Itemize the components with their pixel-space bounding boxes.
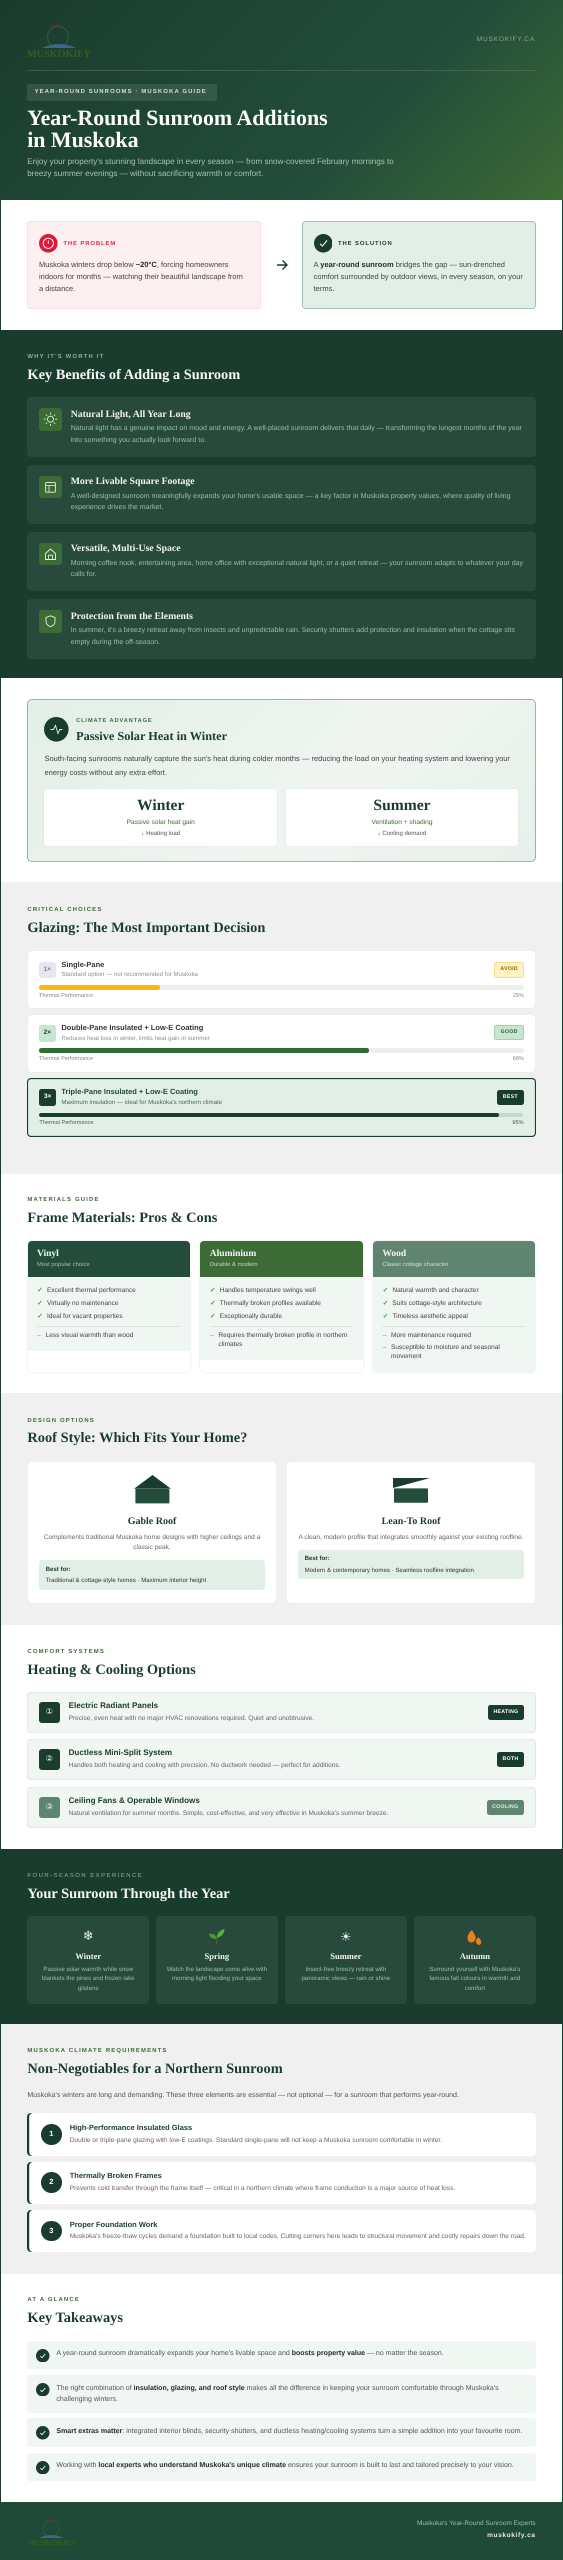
card: vinyl: ✓ — [37, 1287, 43, 1294]
con: More maintenance required — [391, 1332, 471, 1339]
summer note: ↓ Cooling demand — [378, 831, 426, 837]
card: vinyl: ✓ — [37, 1313, 43, 1320]
pro: Handles temperature swings well — [220, 1287, 316, 1294]
badge: avoid — [494, 962, 524, 978]
card: gable roof — [28, 1462, 276, 1603]
best for label: Best for: — [305, 1555, 330, 1562]
wood name: Wood — [382, 1249, 406, 1259]
requirement name: Proper Foundation Work — [70, 2220, 157, 2229]
requirement 2 — [27, 2162, 536, 2204]
icon: floor plan — [39, 476, 62, 498]
takeaway 4 — [27, 2453, 536, 2481]
problem label: THE PROBLEM — [63, 241, 116, 247]
card: wood: – — [383, 1332, 386, 1339]
takeaway text — [56, 2384, 499, 2403]
heading: Non-Negotiables for a Northern Sunroom — [27, 2061, 283, 2077]
intro text: Enjoy your property's stunning landscape in every season — from snow-covered February mornings to — [27, 157, 394, 166]
requirement 1 — [27, 2113, 536, 2156]
best for box — [298, 1550, 524, 1579]
benefit text — [71, 424, 522, 444]
card: vinyl: – — [37, 1332, 41, 1339]
title: in Muskoka — [27, 127, 139, 152]
number — [41, 2124, 62, 2145]
number: 1 — [49, 2129, 53, 2138]
solution text: A year-round sunroom bridges the gap — sun-drenched — [314, 260, 505, 269]
bar label: Thermal Performance — [39, 993, 93, 999]
season text — [166, 1966, 267, 1982]
badge: both: BOTH — [503, 1756, 518, 1762]
heading: Heating & Cooling Options — [27, 1662, 196, 1678]
icon: gable house — [134, 1475, 171, 1504]
glazing: single pane — [28, 951, 535, 1008]
section label: FOUR-SEASON EXPERIENCE — [27, 1873, 143, 1879]
con: Susceptible to moisture and seasonal — [391, 1344, 500, 1351]
wood header — [373, 1241, 535, 1277]
card: aluminium: ✓ — [210, 1313, 216, 1320]
card: lean-to roof — [287, 1462, 535, 1603]
footer tagline: Muskoka's Year-Round Sunroom Experts — [417, 2520, 536, 2527]
winter text: Passive solar heat gain — [127, 819, 195, 826]
bar label: Thermal Performance — [39, 1056, 93, 1062]
number: 2 — [49, 2177, 53, 2186]
badge: heating — [488, 1705, 524, 1720]
heading: Key Benefits of Adding a Sunroom — [27, 367, 240, 383]
season text: blankets the pines and frozen lake — [42, 1975, 135, 1982]
season text: comfort — [465, 1985, 485, 1992]
benefit text: A well-designed sunroom meaningfully expands your home's usable space — a key factor in Muskoka property values, where quality of living — [71, 493, 511, 500]
tag line pill — [27, 84, 217, 101]
card: wood: – — [383, 1344, 386, 1351]
card: vinyl: ✓ — [37, 1300, 43, 1307]
takeaway 3 — [27, 2418, 536, 2447]
panel text: South-facing sunrooms naturally capture the sun's heat during colder months — reducing the load on your heating system and lowering your — [44, 754, 510, 763]
card: wood — [373, 1241, 535, 1372]
option text: Handles both heating and cooling with precision. No ductwork needed — perfect for additions. — [69, 1762, 340, 1769]
season text: panoramic views — rain or shine — [302, 1975, 390, 1982]
benefit text: empty during the off-season. — [71, 639, 160, 646]
benefit text: Morning coffee nook, entertaining area, home office with exceptional natural light, or a quiet retreat — your sunroom adapts to whatever your day — [71, 560, 523, 567]
heading: Key Takeaways — [27, 2310, 123, 2326]
performance bar — [39, 985, 524, 990]
icon: seedling — [209, 1929, 224, 1945]
vinyl note: Most popular choice — [37, 1262, 90, 1268]
requirement text: Muskoka's freeze-thaw cycles demand a foundation built to local codes. Cutting corners here leads to structural movement and costly repairs down the road. — [70, 2233, 526, 2240]
roof text: A clean, modern profile that integrates smoothly against your existing roofline. — [299, 1534, 523, 1541]
icon: check — [36, 2383, 50, 2396]
badge: cooling: COOLING — [492, 1804, 518, 1810]
intro text — [27, 157, 394, 178]
card: wood: ✓ — [383, 1313, 388, 1320]
benefit title: More Livable Square Footage — [71, 476, 195, 487]
section: passive solar — [1, 678, 562, 882]
season text: Insect-free breezy retreat with — [305, 1966, 386, 1973]
season name: Autumn — [460, 1951, 490, 1961]
season name: Summer — [330, 1951, 361, 1961]
season text: Watch the landscape come alive with — [167, 1966, 267, 1973]
panel text: energy costs without any extra effort. — [44, 768, 167, 777]
requirement text: Double or triple-pane glazing with low-E coatings. Standard single-pane will not keep a Muskoka sunroom comfortable in winter. — [70, 2137, 442, 2144]
requirement text: Prevents cold transfer through the frame itself — critical in a northern climate where frame conduction is a major source of heat loss. — [70, 2185, 455, 2192]
roof text: Complements traditional Muskoka home designs with higher ceilings and a — [44, 1534, 260, 1541]
option: mini-split — [27, 1739, 536, 1780]
number icon: ① — [46, 1707, 53, 1716]
performance bar — [39, 1048, 524, 1053]
best for text: Modern & contemporary homes · Seamless roofline integration — [305, 1567, 474, 1574]
icon: shield — [39, 610, 62, 633]
pro: Thermally broken profiles available — [220, 1300, 321, 1307]
benefit: natural light — [27, 397, 536, 457]
best for box — [39, 1560, 265, 1590]
icon: 3x — [39, 1089, 56, 1106]
badge: good: GOOD — [501, 1029, 518, 1035]
season name: Winter — [75, 1951, 101, 1961]
option: fans and windows — [27, 1787, 536, 1828]
season: spring — [156, 1916, 278, 2004]
badge: avoid: AVOID — [500, 966, 518, 972]
tag line pill: YEAR-ROUND SUNROOMS · MUSKOKA GUIDE — [35, 89, 207, 95]
benefit text — [70, 492, 511, 511]
winter note: ↓ Heating load — [141, 831, 180, 837]
icon: check — [36, 2461, 50, 2474]
option name: Electric Radiant Panels — [69, 1701, 158, 1710]
benefit text: experience drives the market. — [71, 504, 163, 511]
pro: Suits cottage-style architecture — [392, 1300, 482, 1307]
option name: Ductless Mini-Split System — [69, 1748, 172, 1757]
summer text: Ventilation + shading — [371, 819, 432, 826]
benefit: protection — [27, 599, 536, 659]
panel title: Passive Solar Heat in Winter — [76, 729, 227, 743]
glazing: triple pane — [27, 1078, 536, 1137]
takeaway 2 — [27, 2375, 536, 2413]
problem text: indoors for months — watching their beautiful landscape from — [39, 272, 243, 281]
best for label: Best for: — [46, 1566, 71, 1573]
kicker: CLIMATE ADVANTAGE — [76, 718, 153, 724]
requirement name: High-Performance Insulated Glass — [70, 2123, 192, 2132]
benefit text: In summer, it's a breezy retreat away from insects and unpredictable rain. Security shutters add protection and insulation when the cottage sits — [71, 627, 515, 634]
card: wood: ✓ — [383, 1287, 388, 1294]
season name: Spring — [205, 1951, 229, 1961]
option: radiant panels — [27, 1692, 536, 1733]
benefit title: Versatile, Multi-Use Space — [71, 543, 181, 554]
season text: morning light flooding your space — [172, 1975, 262, 1982]
pro: Virtually no maintenance — [47, 1300, 119, 1307]
option name: Triple-Pane Insulated + Low-E Coating — [61, 1087, 198, 1096]
footer site link: muskokify.ca — [487, 2532, 536, 2539]
card: summer — [286, 789, 518, 846]
takeaway 1 — [27, 2341, 536, 2369]
pro: Exceptionally durable — [220, 1313, 282, 1320]
card: aluminium: ✓ — [210, 1287, 216, 1294]
icon: 1x: 1× — [44, 966, 51, 973]
wood note: Classic cottage character — [382, 1262, 449, 1268]
badge: good — [494, 1025, 524, 1040]
season text: Surround yourself with Muskoka's — [429, 1966, 520, 1973]
roof text — [44, 1534, 260, 1551]
panel: solution — [302, 221, 536, 309]
panel text — [44, 754, 510, 777]
number icon — [39, 1702, 60, 1723]
icon: alert — [39, 234, 58, 253]
number icon: ③ — [46, 1802, 53, 1811]
benefit text — [71, 560, 523, 578]
season text: famous fall colours in warmth and — [429, 1975, 520, 1982]
card: wood: ✓ — [383, 1300, 388, 1307]
solution label: THE SOLUTION — [338, 241, 393, 247]
option note: Standard option — not recommended for Muskoka — [61, 971, 198, 978]
season: winter — [27, 1916, 149, 2004]
card: aluminium: – — [210, 1332, 214, 1339]
icon: leaves — [468, 1930, 482, 1945]
pro: Natural warmth and character — [392, 1287, 479, 1294]
section: non-negotiables — [1, 2024, 562, 2274]
section: four seasons — [1, 1849, 562, 2024]
takeaway text: challenging winters. — [56, 2396, 118, 2403]
takeaway text: A year-round sunroom dramatically expands your home's livable space and boosts property value — no matter the season. — [56, 2350, 444, 2357]
solution text: terms. — [314, 284, 334, 293]
option name: Ceiling Fans & Operable Windows — [69, 1796, 200, 1805]
icon: 1x — [39, 962, 56, 978]
pro: Ideal for vacant properties — [47, 1313, 123, 1320]
section: problem and solution — [1, 200, 562, 330]
number icon — [39, 1797, 60, 1818]
title — [27, 105, 328, 152]
aluminium note: Durable & modern — [210, 1262, 258, 1268]
icon: snowflake: ❄ — [83, 1929, 94, 1944]
option text: Natural ventilation for summer months. Simple, cost-effective, and very effective in Muskoka's summer breeze. — [69, 1810, 388, 1817]
con: Requires thermally broken profile in northern — [218, 1332, 348, 1339]
icon: 3x: 3× — [44, 1093, 51, 1100]
problem text: Muskoka winters drop below −20°C, forcing homeowners — [39, 260, 229, 269]
icon: lean-to house — [393, 1478, 430, 1503]
badge: best — [497, 1090, 524, 1105]
option text: Precise, even heat with no major HVAC renovations required. Quiet and unobtrusive. — [69, 1715, 314, 1722]
requirement 3 — [27, 2210, 536, 2252]
title: Year-Round Sunroom Additions — [27, 105, 328, 130]
con: climates — [218, 1341, 242, 1348]
performance bar — [39, 1113, 523, 1117]
takeaway text: Working with local experts who understand Muskoka's unique climate ensures your sunroom is built to last and tailored precisely to your vision. — [56, 2462, 514, 2469]
card: winter — [44, 789, 277, 846]
glazing: double pane — [28, 1015, 535, 1072]
section label: CRITICAL CHOICES — [27, 907, 102, 913]
icon: sun — [39, 408, 62, 431]
benefit: square footage — [27, 465, 536, 524]
problem text: a distance. — [39, 284, 75, 293]
section: key benefits — [1, 330, 562, 678]
season text — [42, 1966, 135, 1992]
pro: Timeless aesthetic appeal — [392, 1313, 468, 1320]
heading: Your Sunroom Through the Year — [27, 1886, 230, 1902]
section label: MUSKOKA CLIMATE REQUIREMENTS — [27, 2048, 168, 2054]
icon: check — [36, 2349, 50, 2362]
panel: problem — [27, 221, 261, 309]
season: autumn — [414, 1916, 536, 2004]
aluminium name: Aluminium — [210, 1249, 256, 1259]
bar label: Thermal Performance — [39, 1120, 93, 1126]
aluminium header — [200, 1241, 363, 1277]
section: roof style — [1, 1393, 562, 1625]
badge: both — [497, 1752, 524, 1767]
intro text: breezy summer evenings — without sacrificing warmth or comfort. — [27, 169, 263, 178]
section: key takeaways — [1, 2274, 562, 2502]
footer — [0, 2502, 563, 2560]
heading: Frame Materials: Pros & Cons — [27, 1210, 217, 1226]
roof text: classic peak. — [133, 1544, 171, 1551]
bar value: 25% — [513, 993, 524, 999]
footer logo — [28, 2518, 77, 2546]
pro: Excellent thermal performance — [47, 1287, 136, 1294]
summer heading: Summer — [373, 797, 431, 814]
section: hero header — [0, 0, 563, 200]
section label: AT A GLANCE — [27, 2297, 80, 2303]
bar value: 95% — [512, 1120, 524, 1126]
vinyl header — [28, 1241, 190, 1277]
number icon — [39, 1749, 60, 1770]
best for text: Traditional & cottage-style homes · Maximum interior height — [46, 1577, 206, 1584]
card: aluminium — [200, 1241, 363, 1372]
section: heating and cooling — [1, 1625, 562, 1849]
section label: WHY IT'S WORTH IT — [27, 354, 104, 360]
icon: sun: ☀ — [340, 1929, 351, 1944]
benefit title: Natural Light, All Year Long — [71, 409, 191, 420]
site link: MUSKOKIFY.CA — [477, 36, 535, 43]
takeaway text: The right combination of insulation, glazing, and roof style makes all the difference in keeping your sunroom comfortable through Muskoka's — [56, 2385, 499, 2392]
con: Less visual warmth than wood — [46, 1332, 133, 1339]
option note: Reduces heat loss in winter, limits heat gain in summer — [61, 1035, 210, 1042]
benefit text: into something you actually look forward to. — [71, 437, 206, 444]
card: vinyl — [28, 1241, 190, 1372]
number: 3 — [49, 2226, 53, 2235]
season text: Passive solar warmth while snow — [43, 1966, 133, 1973]
section label: COMFORT SYSTEMS — [27, 1649, 105, 1655]
card: aluminium: ✓ — [210, 1300, 216, 1307]
arrow — [277, 260, 288, 270]
section label: MATERIALS GUIDE — [27, 1197, 100, 1203]
icon: 2x: 2× — [44, 1029, 51, 1036]
solution text: comfort surrounded by outdoor views, in every season, on your — [314, 272, 523, 281]
requirement name: Thermally Broken Frames — [70, 2171, 162, 2180]
icon: check — [36, 2426, 50, 2440]
logo — [27, 24, 92, 59]
option note: Maximum insulation — ideal for Muskoka's northern climate — [61, 1099, 222, 1106]
benefit title: Protection from the Elements — [71, 611, 193, 622]
intro text: Muskoka's winters are long and demanding. These three elements are essential — not optional — for a sunroom that performs year-round. — [27, 2092, 459, 2099]
season text: glistens — [78, 1985, 99, 1992]
number icon: ② — [46, 1754, 53, 1763]
panel: passive solar heat — [27, 699, 536, 862]
benefit text: Natural light has a genuine impact on mood and energy. A well-placed sunroom delivers that daily — transforming the longest months of the year — [71, 425, 522, 432]
icon: 2x — [39, 1025, 56, 1042]
option name: Double-Pane Insulated + Low-E Coating — [61, 1023, 203, 1032]
icon: pulse — [44, 717, 69, 742]
badge: cooling — [487, 1800, 524, 1815]
winter heading: Winter — [137, 797, 184, 814]
icon: check — [314, 234, 332, 253]
number — [41, 2172, 62, 2193]
con — [218, 1332, 348, 1348]
con — [391, 1344, 500, 1360]
vinyl name: Vinyl — [37, 1249, 59, 1259]
benefit text: calls for. — [71, 571, 97, 578]
season text — [302, 1966, 390, 1982]
number — [41, 2221, 62, 2241]
icon: house — [39, 543, 62, 565]
roof name: Gable Roof — [128, 1516, 176, 1527]
heading: Roof Style: Which Fits Your Home? — [27, 1430, 247, 1446]
season: summer — [285, 1916, 407, 2004]
section label: DESIGN OPTIONS — [27, 1418, 95, 1424]
heading: Glazing: The Most Important Decision — [27, 920, 265, 936]
option name: Single-Pane — [61, 960, 104, 969]
badge: heating: HEATING — [493, 1709, 519, 1715]
season text — [429, 1966, 520, 1992]
roof name: Lean-To Roof — [382, 1516, 440, 1527]
problem text — [39, 260, 243, 293]
con: movement — [391, 1352, 422, 1360]
section: glazing — [1, 882, 562, 1174]
section: frame materials — [1, 1174, 562, 1393]
badge: best: BEST — [503, 1094, 518, 1100]
benefit text — [71, 626, 515, 646]
benefit: multi-use — [27, 532, 536, 591]
solution text — [314, 260, 523, 293]
takeaway text: Smart extras matter: integrated interior blinds, security shutters, and ductless heating/cooling systems turn a simple addition into your favourite room. — [56, 2428, 522, 2435]
bar value: 68% — [513, 1056, 524, 1062]
